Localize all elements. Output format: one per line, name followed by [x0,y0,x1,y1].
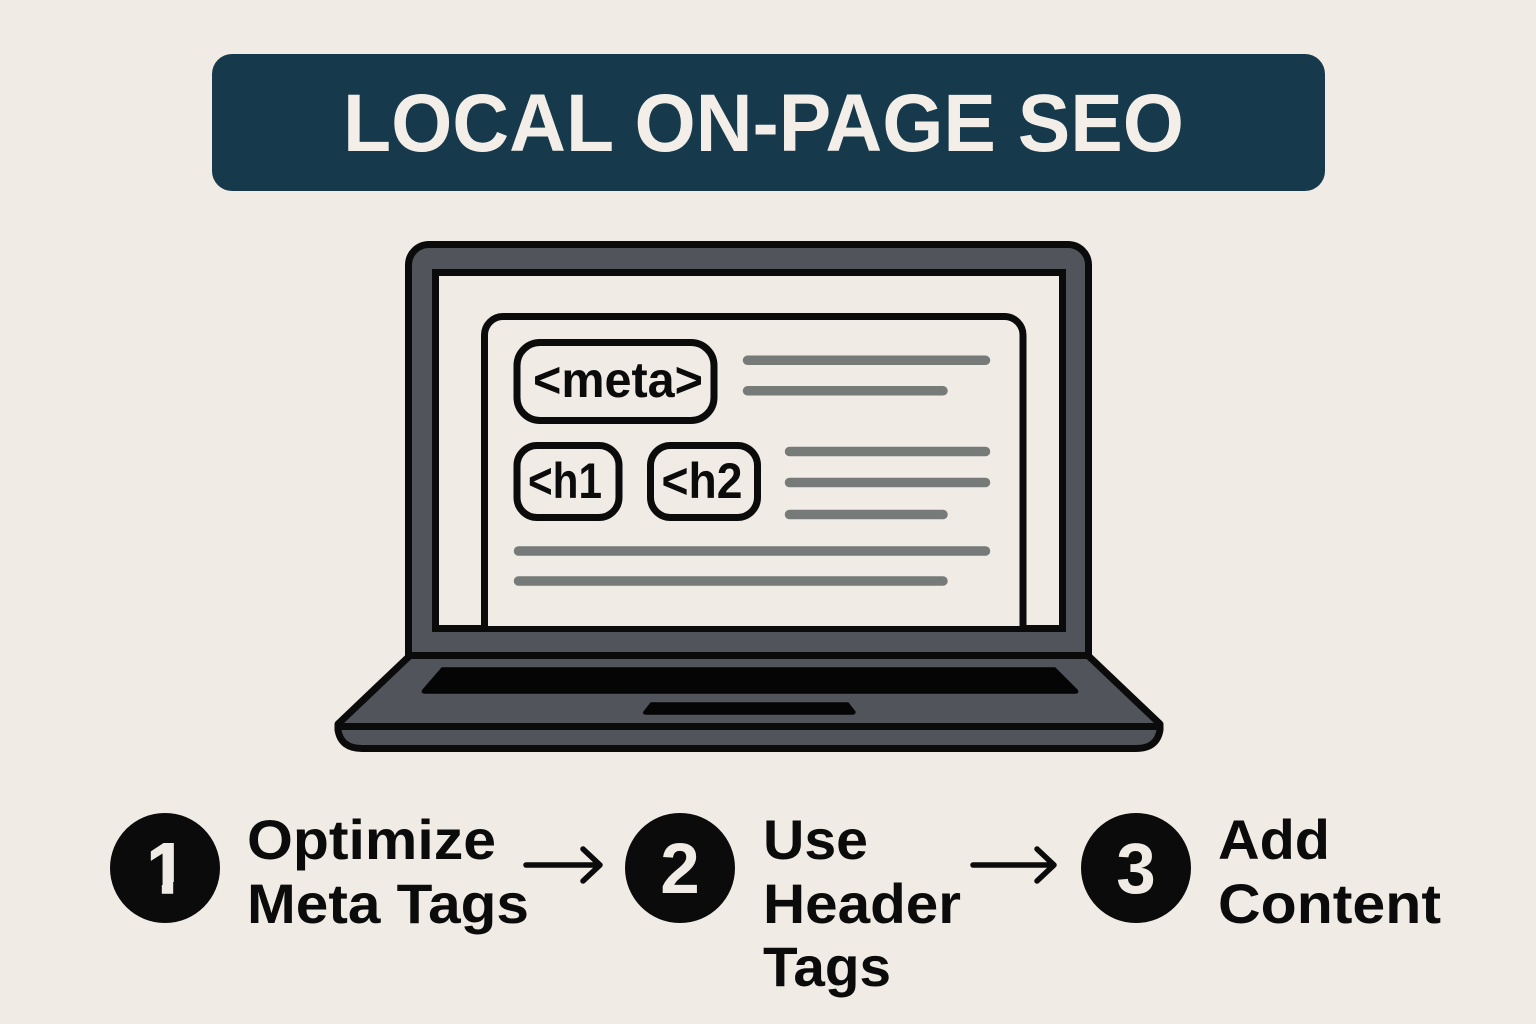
arrow: step 2 to step 3 [973,849,1054,881]
laptop lid [408,244,1088,658]
h2 tag badge [650,446,758,518]
keyboard [422,668,1078,693]
number badge 3: 3 [1116,830,1156,909]
step 2 label: Tags [763,935,891,998]
meta tag badge [517,342,714,420]
step 2 [625,808,961,998]
web page document [484,316,1023,626]
number badge 3 [1081,813,1191,923]
h1 tag badge: <h1 [528,453,602,509]
title banner [212,54,1325,191]
step 2 label: Use [763,808,868,871]
step 3 label: Content [1218,872,1441,935]
laptop base [338,656,1160,748]
step 1 label: Meta Tags [247,872,529,935]
h2 tag badge: <h2 [662,453,742,509]
arrow: step 1 to step 2 [526,849,600,881]
step 1 [110,808,529,935]
step 3 label: Add [1218,808,1330,871]
step 3 [1081,808,1441,935]
number badge 2: 2 [660,830,700,909]
placeholder text lines [518,360,986,581]
icon: laptop [338,244,1160,748]
number badge 1: 1 [147,830,186,909]
laptop screen [436,272,1062,628]
title banner: LOCAL ON-PAGE SEO [343,78,1184,169]
trackpad [644,703,855,714]
number badge 1 [110,813,220,923]
step 2 label: Header [763,872,961,935]
h1 tag badge [517,446,619,518]
number badge 2 [625,813,735,923]
meta tag badge: <meta> [533,352,703,408]
step 1 label: Optimize [247,808,496,871]
